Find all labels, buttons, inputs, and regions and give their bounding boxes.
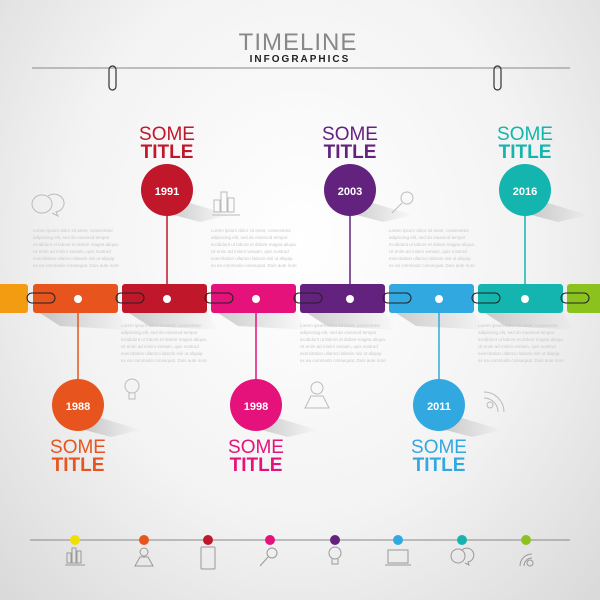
event 2003: 2003 bbox=[338, 186, 362, 198]
text blocks lorem: exercitation ullamco laboris nisi ut aliquip bbox=[300, 351, 382, 356]
event 1991: TITLE bbox=[141, 142, 193, 163]
event 2011: 2011 bbox=[427, 401, 451, 413]
event 2003 bbox=[322, 124, 378, 284]
event 1998 bbox=[228, 313, 284, 476]
text blocks lorem: ex ea commodo consequat. Duis aute irure bbox=[300, 358, 386, 363]
bottom nav bbox=[30, 535, 570, 569]
event 1998: 1998 bbox=[244, 401, 268, 413]
text blocks lorem: Ut enim ad minim veniam, quis nostrud bbox=[300, 344, 378, 349]
timeline bar bbox=[0, 284, 600, 313]
text blocks lorem: adipiscing elit, sed do eiusmod tempor bbox=[389, 235, 466, 240]
text blocks lorem: incididunt ut labore et dolore magna aliqua. bbox=[478, 337, 564, 342]
event 1988: 1988 bbox=[66, 401, 90, 413]
text blocks lorem: Ut enim ad minim veniam, quis nostrud bbox=[33, 249, 111, 254]
text blocks lorem: adipiscing elit, sed do eiusmod tempor bbox=[121, 330, 198, 335]
text blocks lorem: Ut enim ad minim veniam, quis nostrud bbox=[389, 249, 467, 254]
title: TIMELINE bbox=[239, 29, 357, 56]
event 1991: 1991 bbox=[155, 186, 179, 198]
text blocks lorem: exercitation ullamco laboris nisi ut aliquip bbox=[389, 256, 471, 261]
text blocks lorem: exercitation ullamco laboris nisi ut aliquip bbox=[478, 351, 560, 356]
title: INFOGRAPHICS bbox=[250, 54, 350, 65]
text blocks lorem: adipiscing elit, sed do eiusmod tempor bbox=[211, 235, 288, 240]
text blocks lorem bbox=[33, 228, 564, 363]
text blocks lorem: incididunt ut labore et dolore magna aliqua. bbox=[33, 242, 119, 247]
text blocks lorem: ex ea commodo consequat. Duis aute irure bbox=[121, 358, 207, 363]
text blocks lorem: ex ea commodo consequat. Duis aute irure bbox=[211, 263, 297, 268]
event 2011: TITLE bbox=[413, 455, 465, 476]
event 2011: SOME bbox=[411, 437, 467, 458]
text blocks lorem: Ut enim ad minim veniam, quis nostrud bbox=[478, 344, 556, 349]
text blocks lorem: exercitation ullamco laboris nisi ut aliquip bbox=[121, 351, 203, 356]
event 1988: SOME bbox=[50, 437, 106, 458]
text blocks lorem: Lorem ipsum dolor sit amet, consectetur bbox=[478, 323, 559, 328]
event 1998: TITLE bbox=[230, 455, 282, 476]
event 2003: TITLE bbox=[324, 142, 376, 163]
event 1991 bbox=[139, 124, 195, 284]
text blocks lorem: Lorem ipsum dolor sit amet, consectetur bbox=[33, 228, 114, 233]
text blocks lorem: Ut enim ad minim veniam, quis nostrud bbox=[121, 344, 199, 349]
event 2016: SOME bbox=[497, 124, 553, 145]
text blocks lorem: incididunt ut labore et dolore magna aliqua. bbox=[300, 337, 386, 342]
text blocks lorem: Lorem ipsum dolor sit amet, consectetur bbox=[121, 323, 202, 328]
text blocks lorem: exercitation ullamco laboris nisi ut aliquip bbox=[33, 256, 115, 261]
text blocks lorem: Lorem ipsum dolor sit amet, consectetur bbox=[300, 323, 381, 328]
text blocks lorem: adipiscing elit, sed do eiusmod tempor bbox=[300, 330, 377, 335]
event 1998: SOME bbox=[228, 437, 284, 458]
event 1991: SOME bbox=[139, 124, 195, 145]
text blocks lorem: ex ea commodo consequat. Duis aute irure bbox=[478, 358, 564, 363]
text blocks lorem: adipiscing elit, sed do eiusmod tempor bbox=[33, 235, 110, 240]
text blocks lorem: incididunt ut labore et dolore magna aliqua. bbox=[121, 337, 207, 342]
text blocks lorem: Lorem ipsum dolor sit amet, consectetur bbox=[389, 228, 470, 233]
text blocks lorem: Ut enim ad minim veniam, quis nostrud bbox=[211, 249, 289, 254]
icons in content bbox=[32, 192, 504, 412]
icon: paperclips top bbox=[109, 66, 501, 90]
text blocks lorem: incididunt ut labore et dolore magna aliqua. bbox=[211, 242, 297, 247]
text blocks lorem: exercitation ullamco laboris nisi ut aliquip bbox=[211, 256, 293, 261]
event 2016: 2016 bbox=[513, 186, 537, 198]
text blocks lorem: incididunt ut labore et dolore magna aliqua. bbox=[389, 242, 475, 247]
event 2003: SOME bbox=[322, 124, 378, 145]
event 2011 bbox=[411, 313, 467, 476]
shadows bbox=[40, 200, 588, 437]
text blocks lorem: adipiscing elit, sed do eiusmod tempor bbox=[478, 330, 555, 335]
event 2016 bbox=[497, 124, 553, 284]
event 1988: TITLE bbox=[52, 455, 104, 476]
event 2016: TITLE bbox=[499, 142, 551, 163]
text blocks lorem: ex ea commodo consequat. Duis aute irure bbox=[33, 263, 119, 268]
text blocks lorem: Lorem ipsum dolor sit amet, consectetur bbox=[211, 228, 292, 233]
event 1988 bbox=[50, 313, 106, 476]
text blocks lorem: ex ea commodo consequat. Duis aute irure bbox=[389, 263, 475, 268]
